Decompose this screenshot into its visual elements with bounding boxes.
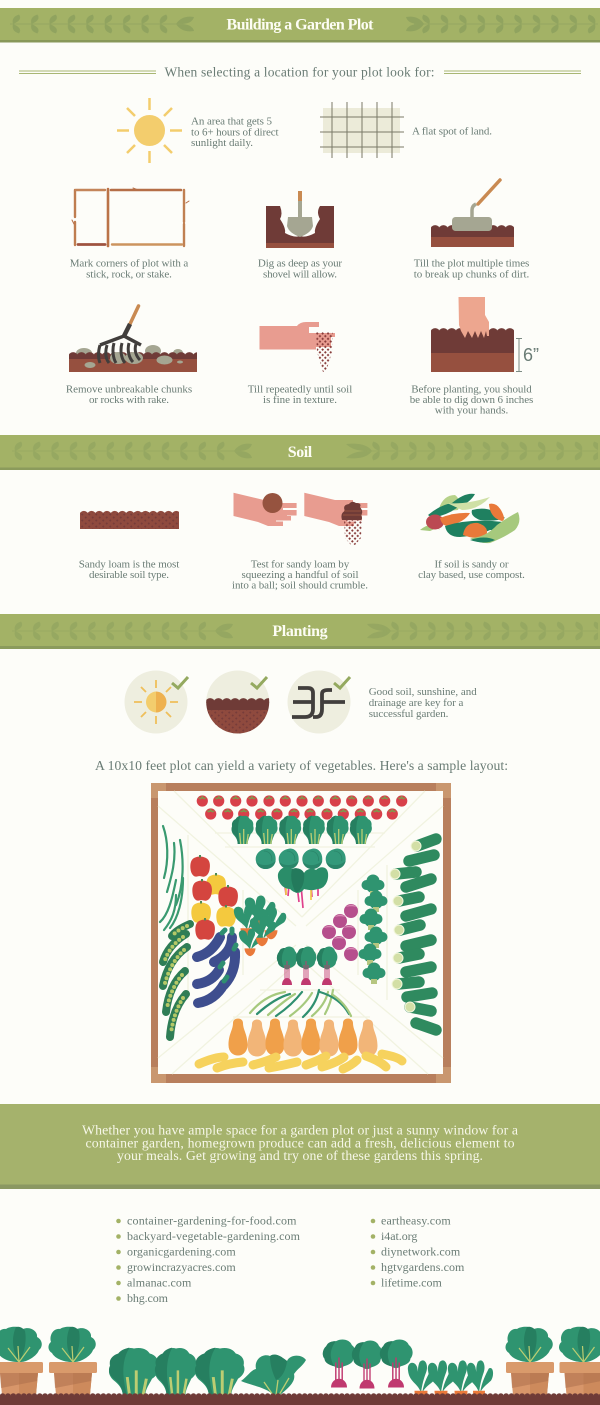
tomatoes [197,795,407,820]
subheading: location: When selecting a location for your plot look for: [164,64,434,80]
kale [241,1355,306,1395]
caption: compost: If soil is sandy or [434,558,509,570]
text: sunlight: An area that gets 5 [191,116,272,128]
caption: mark corners [70,258,188,280]
caption: till: Till the plot multiple times [414,258,529,270]
caption: before planting: Before planting, you should [411,384,532,396]
header: Building a Garden Plot: Building a Garden Plot [226,16,374,34]
icon: sandy loam soil [80,510,179,529]
lettuce row [232,816,372,844]
caption: sandy loam: Sandy loam is the most [79,558,179,570]
caption: till [414,258,530,280]
beets [277,947,337,985]
caption: sandy loam [79,558,179,581]
icon: stakes marking plot [72,188,189,246]
lettuces [109,1348,244,1396]
caption: till repeatedly: Till repeatedly until soil [248,384,352,396]
butternut squash [228,1018,378,1056]
potted plants left [0,1327,97,1395]
header: Planting [0,614,600,649]
header: Building a Garden Plot [0,8,600,42]
turnips [322,904,358,961]
sources: left column: container-gardening-for-food.com [127,1214,297,1228]
closing text: your meals. Get growing and try one of these gardens this spring. [117,1148,483,1163]
caption: till repeatedly: is fine in texture. [263,394,337,406]
text: good soil: Good soil, sunshine, and [369,686,477,698]
text: good soil: successful garden. [369,708,449,720]
closing text: Whether you have ample space for a garden plot or just a sunny window for a [82,1122,518,1138]
icon: flat land grid [320,102,404,158]
icon: shovel in soil [266,191,334,248]
sources: left column: growincrazyacres.com [127,1260,236,1274]
heading: sample layout: A 10x10 feet plot can yield a variety of vegetables. Here's a sample layout: [95,758,508,773]
caption: before planting: be able to dig down 6 inches [410,394,533,406]
caption: till repeatedly [248,384,352,406]
sources: right column: diynetwork.com [381,1244,461,1258]
caption: compost: clay based, use compost. [418,569,525,581]
icon: hand digging 6 inches [431,297,539,372]
panel: sample garden plot [151,783,451,1083]
text: sunlight: sunlight daily. [191,137,253,149]
sources: left column: almanac.com [127,1276,192,1290]
icon: soil check [206,670,270,734]
sources: left column: backyard-vegetable-gardening.com [127,1229,301,1243]
pea pods [163,924,190,1037]
text: sunlight: to 6+ hours of direct [191,126,279,138]
yellow squash [199,1054,402,1069]
soil strip [0,1393,600,1405]
caption: rake [66,384,192,406]
caption: before planting: with your hands. [435,404,508,416]
green beans row [250,990,351,1017]
caption: dig: Dig as deep as your [258,258,342,270]
icon: hands testing soil ball [234,493,367,545]
icon: hand sifting soil [260,322,335,372]
sources: left column [116,1214,301,1305]
header: Soil: Soil [288,444,313,461]
icon: sunshine check [124,670,188,734]
footer garden illustration [0,1327,600,1405]
caption: test for sandy loam: squeezing a handful of soil [242,569,358,581]
icon: sun [117,98,182,163]
icon: hoe tilling soil [431,180,514,247]
sources: left column: organicgardening.com [127,1244,236,1258]
caption: rake: or rocks with rake. [89,394,169,406]
caption: rake: Remove unbreakable chunks [66,384,192,396]
header: Soil [0,435,600,470]
text: good soil: drainage are key for a [369,697,464,709]
eggplants [197,929,236,1003]
caption: dig [258,258,342,280]
closing band [0,1104,600,1189]
sources: right column: i4at.org [381,1229,417,1243]
caption: test for sandy loam: Test for sandy loam by [251,558,350,570]
beets [323,1339,413,1388]
sources: right column: eartheasy.com [381,1214,451,1228]
plot frame [151,783,451,1083]
caption: mark corners: stick, rock, or stake. [86,268,172,280]
sources: right column: lifetime.com [381,1276,442,1290]
caption: test for sandy loam [232,558,368,592]
cucumbers [390,839,436,1030]
caption: before planting [410,384,533,416]
text: good soil [369,686,477,720]
chard [278,867,328,908]
broccoli [358,874,388,984]
closing text [82,1122,518,1163]
peppers [190,855,238,940]
caption: dig: shovel will allow. [263,268,337,280]
cabbages [256,849,346,869]
header: Planting: Planting [272,623,328,640]
icon: rake and rocks [69,306,197,372]
carrots [408,1360,493,1403]
potted plants right [506,1327,600,1395]
icon: hand digging 6 inches: 6” [523,345,539,365]
caption: mark corners: Mark corners of plot with a [70,258,188,270]
carrots [234,896,286,956]
closing text: container garden, homegrown produce can add a fresh, delicious element to [86,1136,515,1150]
caption: test for sandy loam: into a ball; soil should crumble. [232,580,368,592]
climbing beans [160,826,183,930]
icon: compost pile [420,494,519,543]
icon: drainage pipes check [288,670,350,734]
sources: right column: hgtvgardens.com [381,1260,465,1274]
caption: compost [418,558,525,581]
sources: left column: bhg.com [127,1291,169,1305]
sources: right column [371,1214,465,1290]
text: flat land: A flat spot of land. [412,126,492,138]
caption: till: to break up chunks of dirt. [414,268,530,280]
caption: sandy loam: desirable soil type. [89,569,169,581]
text: sunlight [191,116,279,149]
